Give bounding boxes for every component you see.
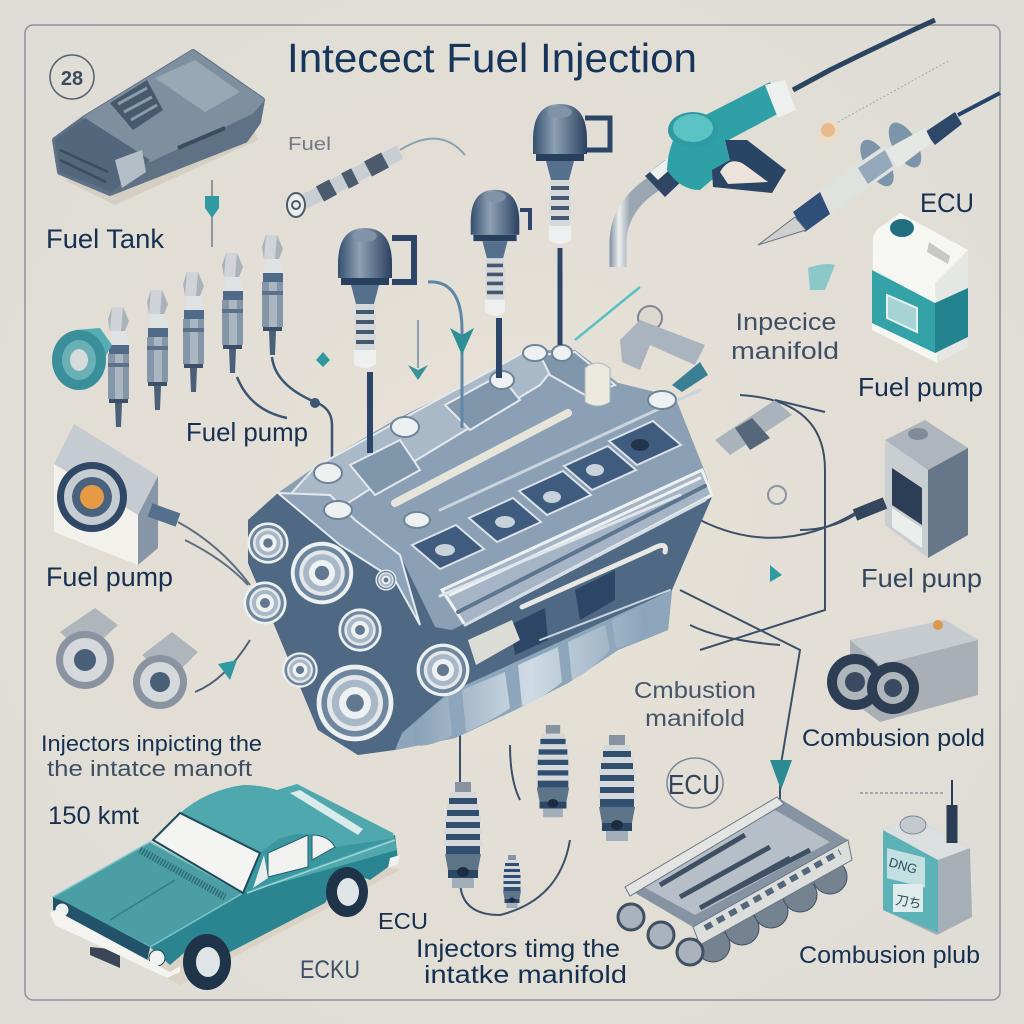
icon: teal small marker xyxy=(770,565,782,582)
label: fuel pump right top: Fuel pump xyxy=(858,372,983,402)
engine: wells xyxy=(412,421,681,569)
spark plug: middle xyxy=(536,725,570,817)
icon: fluid bottle: 刀ち xyxy=(894,892,923,911)
part: right sensor xyxy=(715,400,825,455)
label: ECU center: ECU xyxy=(668,769,720,800)
icon: combustion cylinder xyxy=(827,620,978,722)
icon: intake manifold xyxy=(618,797,852,965)
injector: middle xyxy=(471,190,530,378)
engine: side openings xyxy=(510,570,615,655)
icon: orange sensor dot xyxy=(815,60,950,146)
title: Intecect Fuel Injection xyxy=(287,35,697,81)
label: inpecice manifold xyxy=(731,309,839,365)
manifold: lower runners xyxy=(696,860,847,962)
icon: teal smudge xyxy=(808,264,835,290)
label: 150 km: 150 kmt xyxy=(48,802,139,830)
engine: cream cylinder xyxy=(468,620,520,665)
icon: ECU ring xyxy=(667,758,723,808)
engine: rails xyxy=(395,390,705,640)
icon: twin discs xyxy=(56,608,250,709)
spark plug: lower small xyxy=(502,855,522,908)
label: injectors inpcting xyxy=(41,731,262,781)
spark plugs xyxy=(444,725,636,908)
engine: valve cover ridge xyxy=(290,350,615,505)
label: ECU bottom: ECU xyxy=(378,908,428,934)
icon: car xyxy=(50,784,400,990)
engine block xyxy=(243,345,712,755)
label: injectors timing: Injectors timg the xyxy=(416,935,620,963)
engine: front cover xyxy=(248,493,448,755)
label: injectors timing: intatke manifold xyxy=(424,961,627,989)
spark plug: left xyxy=(444,782,482,888)
icon: teal gear xyxy=(52,328,112,390)
label: combustion manifold: manifold xyxy=(645,705,745,731)
icon: right module box xyxy=(800,420,968,558)
label: injectors inpcting: Injectors inpicting the xyxy=(41,731,262,756)
arrow: teal diagonal xyxy=(575,287,640,340)
arrow: down left xyxy=(408,320,428,380)
label: fuel pump left: Fuel pump xyxy=(46,562,173,592)
injector: left xyxy=(338,228,414,453)
badge: 28: 28 xyxy=(61,68,83,90)
sensor: top center xyxy=(287,139,465,217)
label: combustion manifold xyxy=(634,677,756,731)
engine: intake lower fins xyxy=(395,590,672,750)
icon: injector tool xyxy=(758,93,1000,245)
arrow: to manifold xyxy=(770,760,792,790)
engine: bosses xyxy=(314,345,676,528)
label: ECKU: ECKU xyxy=(300,956,360,984)
label: injectors timing xyxy=(416,935,627,989)
icon: teal dot marker xyxy=(316,352,330,367)
label: fuel tank: Fuel Tank xyxy=(46,224,164,254)
label: fuel punp: Fuel punp xyxy=(861,563,982,593)
label: inpecice manifold: Inpecice xyxy=(736,309,836,336)
connector wires xyxy=(460,395,860,915)
engine: front cover block xyxy=(278,493,420,625)
engine: silhouette xyxy=(248,350,708,755)
engine: pulleys xyxy=(243,522,469,741)
spark plug: right xyxy=(598,735,636,841)
label: combustion pold: Combusion pold xyxy=(802,725,985,752)
icon: fluid bottle xyxy=(860,780,972,935)
small injector row xyxy=(108,235,332,462)
label: combustion manifold: Cmbustion xyxy=(634,677,756,703)
engine: rail band xyxy=(442,470,712,625)
engine: well details xyxy=(435,439,649,556)
part: upper right bracket xyxy=(620,306,708,392)
icon: fuel jug xyxy=(872,213,968,363)
label: ECU top right: ECU xyxy=(920,188,974,218)
icon: teal marker xyxy=(205,180,219,247)
label: injectors inpcting: the intatce manoft xyxy=(47,756,252,781)
label: inpecice manifold: manifold xyxy=(731,338,839,365)
engine: top deck xyxy=(278,350,708,632)
icon: fuel nozzle xyxy=(618,20,935,267)
icon: fluid bottle: DNG xyxy=(887,854,919,877)
label: combustion plub: Combusion plub xyxy=(799,942,980,969)
icon: small ring xyxy=(768,486,786,504)
icon: fuel tank xyxy=(55,52,262,205)
icon: fuel pump box xyxy=(54,424,250,585)
label: fuel small: Fuel xyxy=(288,134,331,154)
engine: dark side band xyxy=(448,497,712,693)
injector: top xyxy=(533,104,610,345)
badge: 28 xyxy=(50,55,94,99)
engine: cream caps xyxy=(585,363,610,406)
label: fuel pump left upper: Fuel pump xyxy=(186,417,308,447)
arrow: teal flow xyxy=(428,282,474,428)
